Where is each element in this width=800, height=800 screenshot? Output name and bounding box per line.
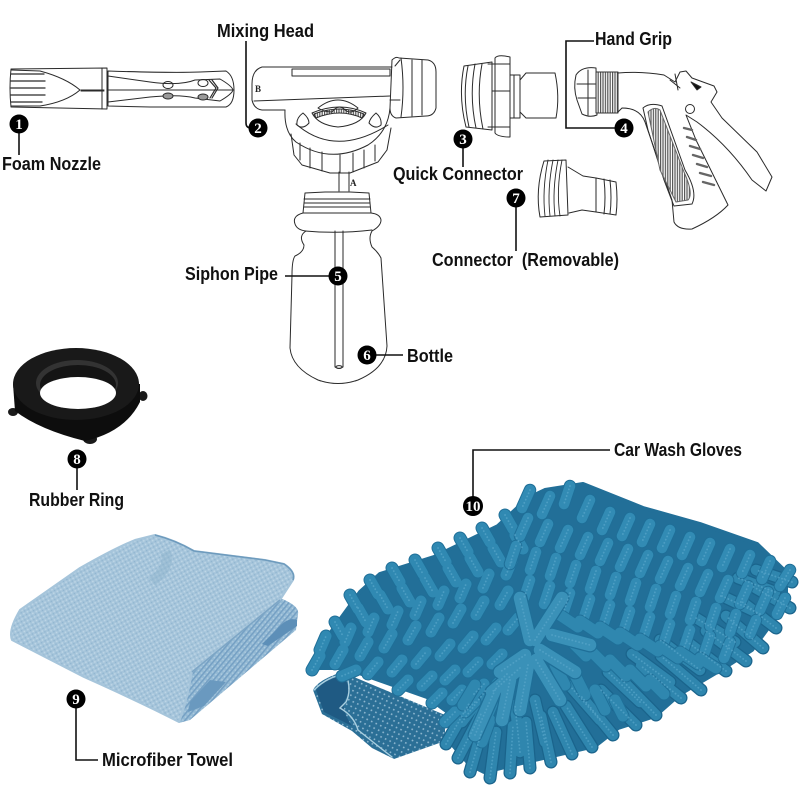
leader: foam nozzle <box>18 133 20 155</box>
label: Hand Grip: Hand Grip <box>595 29 672 49</box>
badge 7 <box>506 188 526 208</box>
lower inner strands <box>463 615 716 742</box>
part: foam nozzle <box>10 68 234 109</box>
leader: siphon pipe <box>285 275 330 277</box>
part: car wash glove <box>312 484 792 778</box>
part: mixing head: B <box>255 84 261 94</box>
centre strands <box>475 598 590 735</box>
badge 7: 7 <box>512 191 520 207</box>
badge 3: 3 <box>459 132 467 148</box>
left lobe strands <box>312 515 523 722</box>
badge 2: 2 <box>254 121 262 137</box>
part: mixing head <box>252 57 436 191</box>
label: Rubber Ring: Rubber Ring <box>29 490 124 510</box>
leader: microfiber towel <box>76 707 98 760</box>
label: Quick Connector: Quick Connector <box>393 164 523 184</box>
leader: removable connector <box>515 206 517 251</box>
badge 8 <box>68 450 86 468</box>
badge 10: 10 <box>466 499 480 515</box>
leader: hand grip <box>566 41 616 128</box>
badge 10 <box>463 496 483 516</box>
badge 1 <box>10 114 28 134</box>
lower fringe strands <box>446 570 792 778</box>
badge 9: 9 <box>72 692 80 708</box>
part: mixing head: A <box>350 178 357 188</box>
badge 5: 5 <box>334 269 342 285</box>
badge 1: 1 <box>15 117 23 133</box>
badge 4: 4 <box>620 121 628 137</box>
part: hand grip spray gun <box>575 68 772 229</box>
badge 4 <box>614 118 634 138</box>
label: Bottle: Bottle <box>407 346 453 366</box>
badge 8: 8 <box>73 452 81 468</box>
label: Mixing Head: Mixing Head <box>217 21 314 41</box>
part: removable connector <box>538 160 617 217</box>
upper strands <box>510 486 790 658</box>
part: rubber ring <box>8 348 148 444</box>
label: Connector (Removable): Connector (Removable) <box>432 250 619 270</box>
leader: mixing head <box>246 41 251 128</box>
badge 6: 6 <box>363 348 371 364</box>
badge 5 <box>328 266 348 286</box>
strand texture <box>312 486 792 778</box>
part: bottle with siphon pipe <box>290 192 387 384</box>
label: Microfiber Towel: Microfiber Towel <box>102 750 233 770</box>
part: quick connector <box>461 56 558 137</box>
leader: rubber ring <box>76 467 78 490</box>
badge 9 <box>66 690 86 708</box>
badge 3 <box>454 130 472 148</box>
leader: bottle <box>375 354 403 356</box>
leader: quick connector <box>462 147 464 167</box>
label: Foam Nozzle: Foam Nozzle <box>2 154 101 174</box>
badge 2 <box>248 118 268 138</box>
glove cuff <box>313 672 445 759</box>
label: Car Wash Gloves: Car Wash Gloves <box>614 440 742 460</box>
part: microfiber towel <box>11 535 298 723</box>
badge 6 <box>358 346 376 364</box>
label: Siphon Pipe: Siphon Pipe <box>185 264 278 284</box>
leader: car wash gloves <box>473 450 610 497</box>
